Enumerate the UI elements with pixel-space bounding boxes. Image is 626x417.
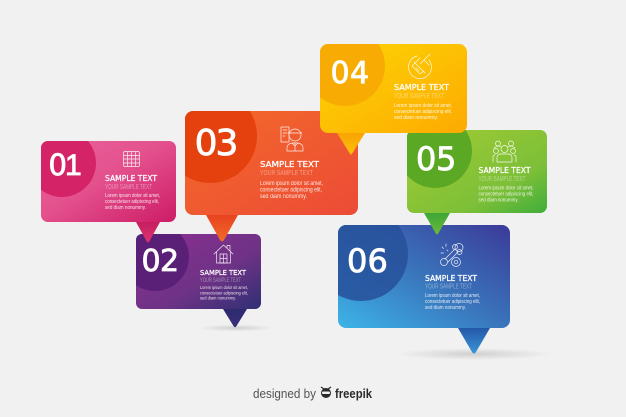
text block 06: consectetuer adipiscing elit, xyxy=(425,299,480,305)
pointer 02 xyxy=(223,309,247,327)
text block 05: SAMPLE TEXT xyxy=(478,166,531,175)
pointer 01 xyxy=(136,222,160,242)
panel: callout 01 xyxy=(41,141,176,242)
icon: wrench and gears xyxy=(440,244,463,266)
text block 02: Lorem ipsum dolor sit amet, xyxy=(200,285,248,291)
text block 01: Lorem ipsum dolor sit amet, xyxy=(105,193,160,199)
text block 04: sed diam nonummy. xyxy=(394,115,438,121)
text block 01: YOUR SAMPLE TEXT xyxy=(105,182,152,191)
text block 04: SAMPLE TEXT xyxy=(394,83,449,92)
text block 03: sed diam nonummy. xyxy=(260,194,307,200)
text block 03 xyxy=(260,160,323,200)
footer: designed by freepik: designed by xyxy=(253,387,317,401)
shadow under callout 06 xyxy=(396,348,552,360)
text block 05: sed diam nonummy. xyxy=(478,198,518,204)
box 03 xyxy=(185,111,358,215)
circle 01 xyxy=(41,141,96,197)
circle 06 xyxy=(338,225,408,301)
text block 02: consectetuer adipiscing elit, xyxy=(200,290,248,296)
text block 06: SAMPLE TEXT xyxy=(425,274,477,283)
icon: calendar grid xyxy=(124,152,140,166)
text block 02 xyxy=(200,269,248,302)
box 04 xyxy=(320,44,467,133)
text block 01: sed diam nonummy. xyxy=(105,205,146,211)
number 02: 02 xyxy=(142,244,179,279)
text block 04: consectetuer adipiscing elit, xyxy=(394,109,452,115)
number 06: 06 xyxy=(347,242,388,280)
text block 04 xyxy=(394,83,452,121)
pointer 05 xyxy=(424,213,450,234)
text block 01: consectetuer adipiscing elit, xyxy=(105,199,159,205)
icon: freepik logo xyxy=(321,387,331,398)
text block 03: consectetuer adipiscing elit, xyxy=(260,188,322,194)
pointer 03 xyxy=(206,215,238,242)
text block 03: SAMPLE TEXT xyxy=(260,160,319,169)
text block 05: consectetuer adipiscing elit, xyxy=(478,192,534,198)
number 04: 04 xyxy=(330,56,369,91)
panel: callout 02 xyxy=(136,234,261,328)
pointer 06 xyxy=(458,328,490,354)
panel: callout 06 xyxy=(338,225,510,354)
text block 03: YOUR SAMPLE TEXT xyxy=(260,168,313,177)
text block 02: sed diam nonummy. xyxy=(200,296,236,302)
circle 02 xyxy=(136,234,189,291)
text block 01 xyxy=(105,174,160,211)
panel: callout 04 xyxy=(320,44,467,154)
icon: group of people xyxy=(493,141,516,162)
text block 01: SAMPLE TEXT xyxy=(105,174,157,183)
text block 06 xyxy=(425,274,480,311)
number 01: 1 xyxy=(65,149,82,182)
box 06 xyxy=(338,225,510,328)
panel: callout 03 xyxy=(185,111,358,242)
panel: callout 05 xyxy=(407,130,547,234)
circle 05 xyxy=(407,130,472,188)
shadow under callout 02 xyxy=(198,324,274,332)
number 05: 05 xyxy=(416,140,456,178)
text block 02: SAMPLE TEXT xyxy=(200,269,247,277)
footer: designed by freepik xyxy=(253,387,372,401)
number 03: 03 xyxy=(195,123,238,164)
text block 04: Lorem ipsum dolor sit amet, xyxy=(394,103,452,109)
pointer 04 xyxy=(337,133,365,154)
box 02 xyxy=(136,234,261,309)
number 01: 0 xyxy=(48,148,67,182)
icon: handshake xyxy=(408,54,431,79)
text block 06: YOUR SAMPLE TEXT xyxy=(425,282,472,290)
text block 04: YOUR SAMPLE TEXT xyxy=(394,91,444,100)
circle 04 xyxy=(320,44,385,106)
text block 05: Lorem ipsum dolor sit amet, xyxy=(478,186,534,192)
text block 05: YOUR SAMPLE TEXT xyxy=(478,174,526,183)
text block 06: Lorem ipsum dolor sit amet, xyxy=(425,293,480,299)
text block 05 xyxy=(478,166,534,204)
circle 03 xyxy=(185,111,257,183)
text block 02: YOUR SAMPLE TEXT xyxy=(200,277,241,284)
icon: house xyxy=(214,245,233,263)
box 01 xyxy=(41,141,176,222)
text block 03: Lorem ipsum dolor sit amet, xyxy=(260,181,323,187)
icon: person with code xyxy=(281,127,303,151)
box 05 xyxy=(407,130,547,213)
text block 06: sed diam nonummy. xyxy=(425,305,466,311)
footer: designed by freepik: freepik xyxy=(335,387,372,401)
